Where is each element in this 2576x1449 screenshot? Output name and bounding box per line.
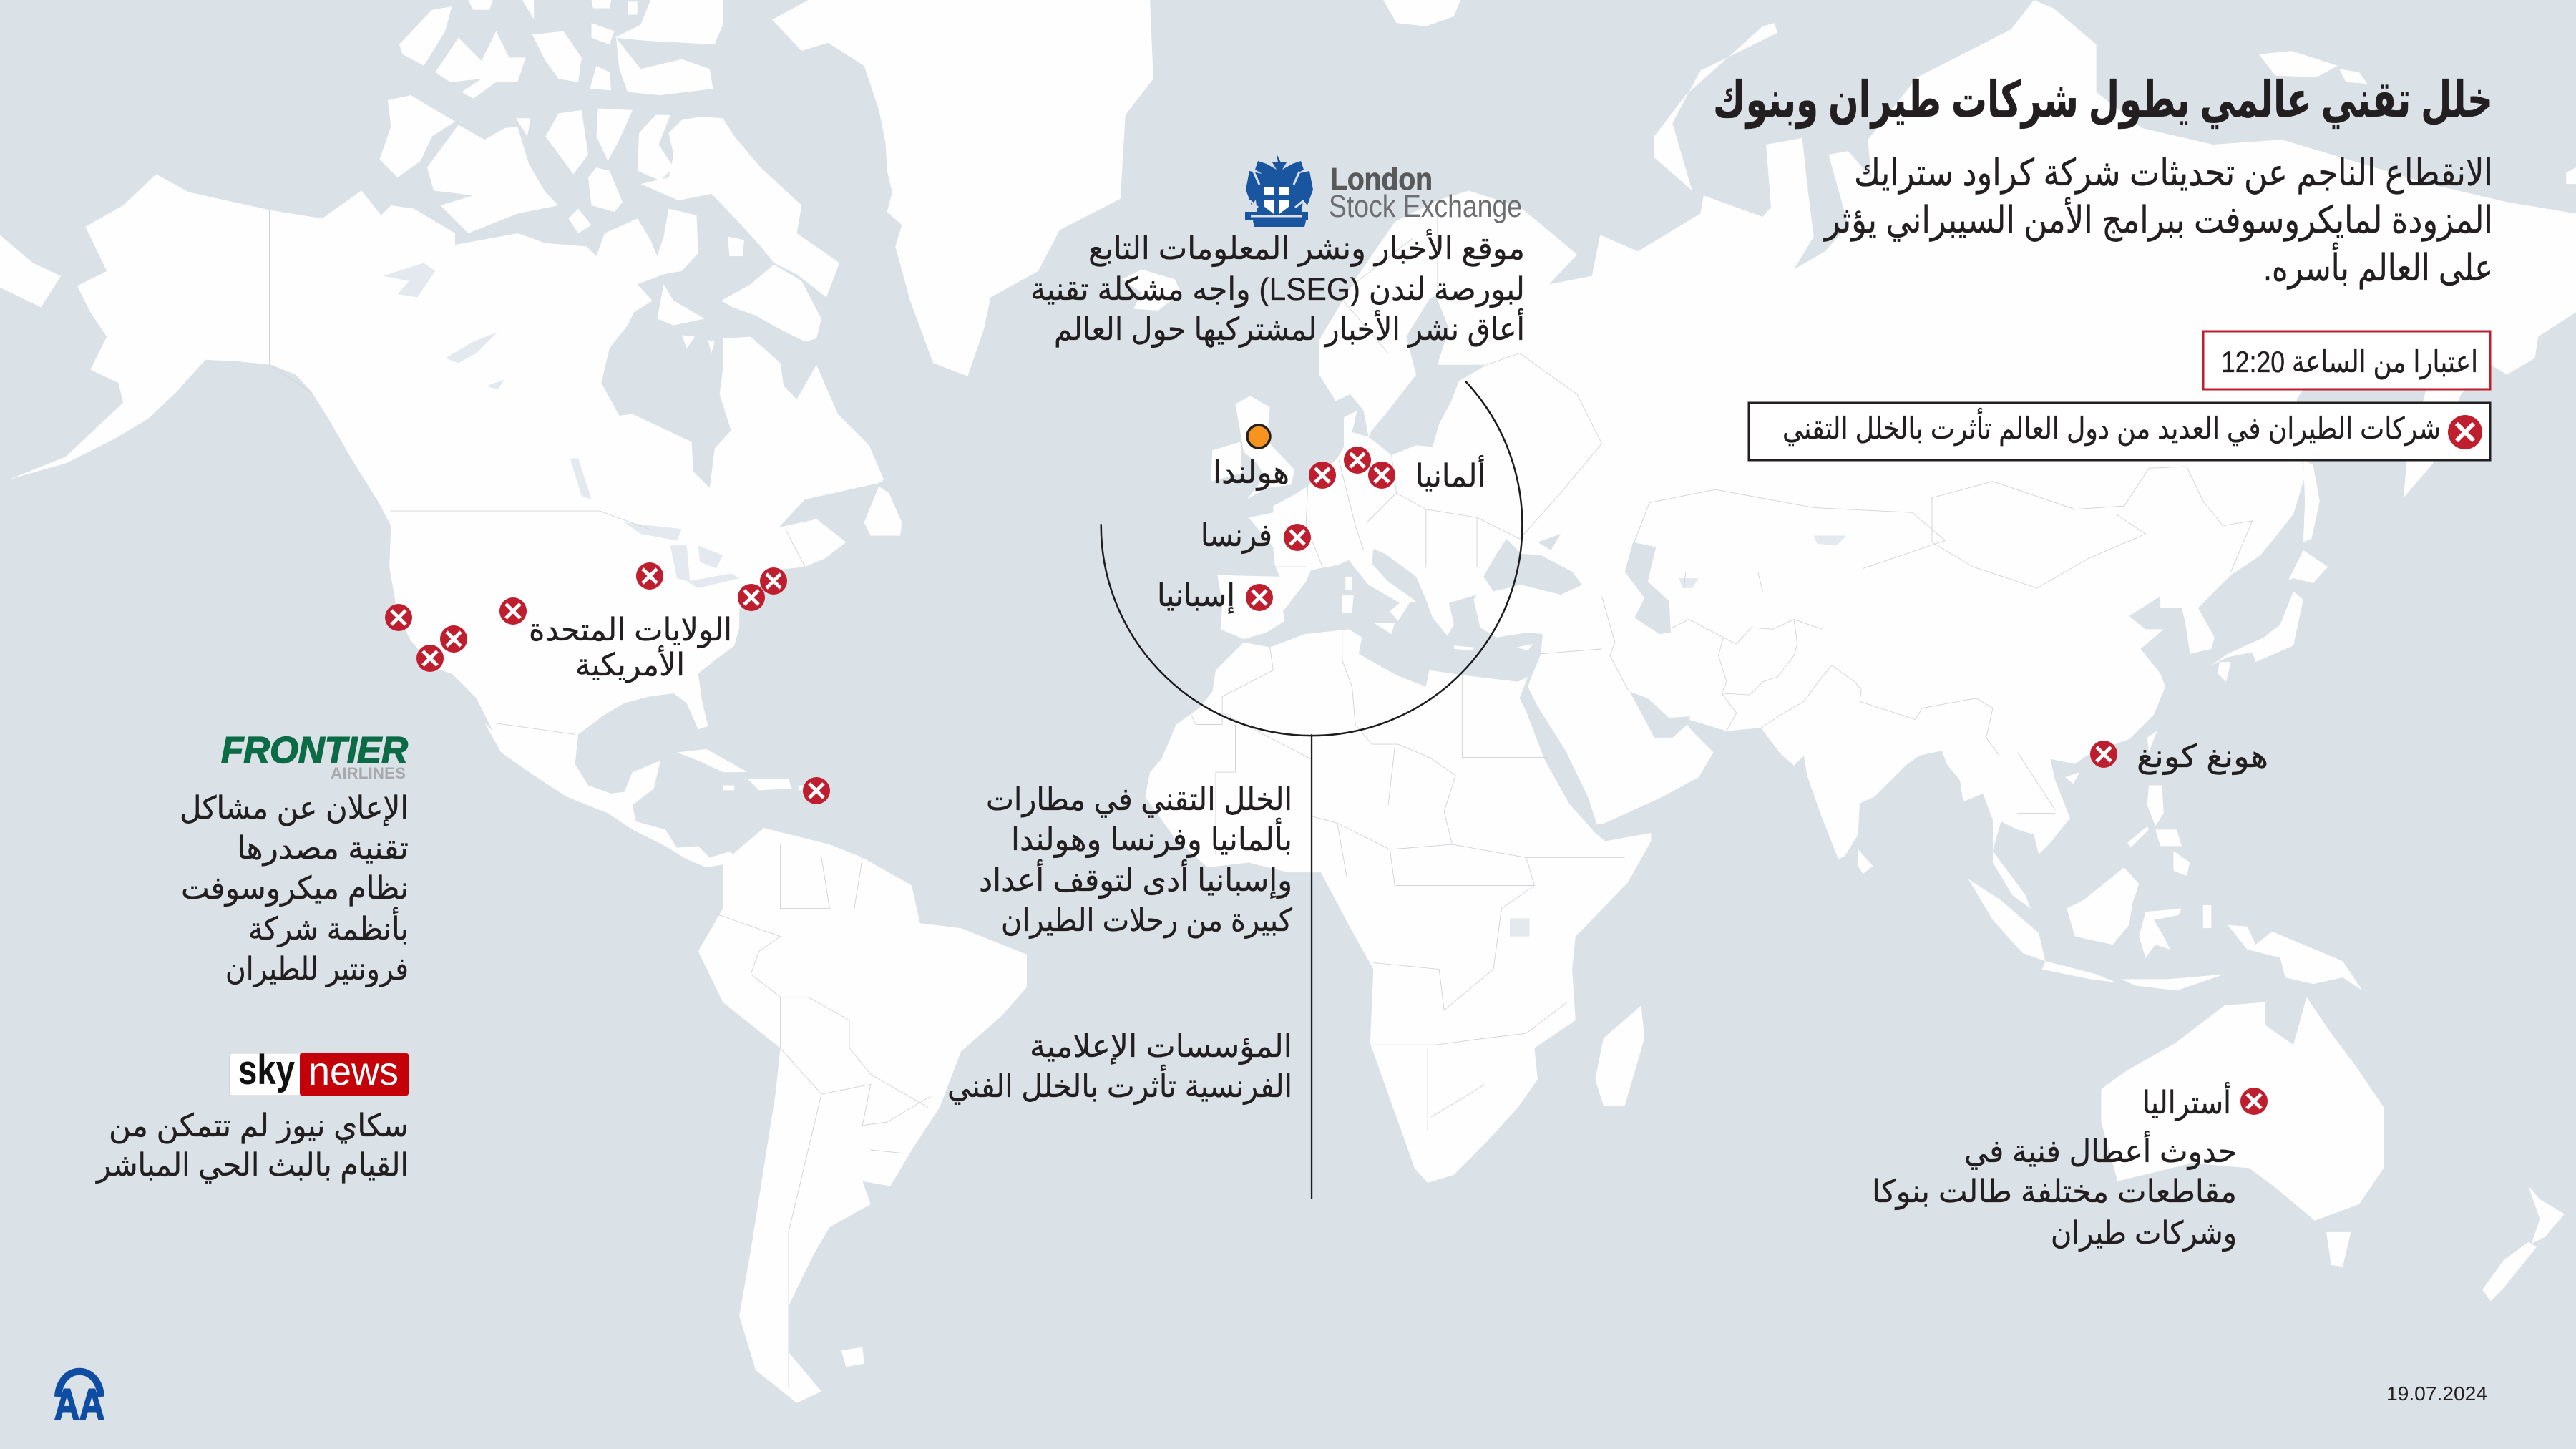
text: LSEG note bbox=[1030, 228, 1525, 348]
text: Australia note: حدوث أعطال فنية في bbox=[1964, 1131, 2237, 1170]
logo: Anadolu Agency: AA bbox=[54, 1380, 104, 1428]
logo: London Stock Exchange: Stock Exchange bbox=[1329, 189, 1522, 224]
text: Frontier note: فرونتير للطيران bbox=[225, 952, 409, 987]
Caspian Sea bbox=[1625, 542, 1671, 634]
label: France: فرنسا bbox=[1201, 518, 1272, 554]
Greenland bbox=[772, 0, 1153, 376]
text: Australia note bbox=[1872, 1131, 2237, 1252]
label: United States bbox=[529, 613, 732, 683]
marker: Australia bbox=[2240, 1088, 2268, 1115]
lakes bbox=[383, 263, 1847, 937]
text: French media note: الفرنسية تأثرت بالخلل الفني bbox=[947, 1064, 1292, 1105]
text: Australia note: مقاطعات مختلفة طالت بنوكا bbox=[1872, 1174, 2237, 1210]
marker: US Colorado bbox=[499, 597, 527, 625]
United Kingdom bbox=[1236, 396, 1294, 499]
text: European airports note: وإسبانيا أدى لتوقف أعداد bbox=[979, 859, 1292, 899]
text: Sky News note bbox=[95, 1108, 409, 1184]
marker: US Nevada bbox=[440, 625, 467, 653]
Africa bbox=[1145, 629, 1651, 1183]
marker: Germany north bbox=[1344, 447, 1371, 474]
text: Sky News note: القيام بالبث الحي المباشر bbox=[95, 1148, 409, 1184]
marker: US California south bbox=[416, 645, 444, 672]
text: Frontier note: الإعلان عن مشاكل bbox=[180, 791, 409, 826]
country borders bbox=[270, 200, 2253, 1388]
text: European airports note: بألمانيا وفرنسا وهولندا bbox=[1011, 817, 1292, 858]
label: Australia: أستراليا bbox=[2142, 1082, 2231, 1121]
icon: crest bbox=[1245, 154, 1313, 227]
subtitle: على العالم بأسره. bbox=[2263, 242, 2493, 290]
label: Hong Kong: هونغ كونغ bbox=[2137, 739, 2268, 775]
text: LSEG note: لبورصة لندن (LSEG) واجه مشكلة تقنية bbox=[1030, 272, 1525, 308]
text: Frontier note bbox=[180, 791, 409, 987]
Southeast Asian islands bbox=[2147, 785, 2164, 826]
label: United States: الأمريكية bbox=[575, 645, 685, 683]
text: Frontier note: بأنظمة شركة bbox=[248, 907, 409, 947]
marker: Hong Kong bbox=[2090, 741, 2117, 768]
subtitle: الانقطاع الناجم عن تحديثات شركة كراود سترايك bbox=[1854, 152, 2493, 195]
label: Netherlands: هولندا bbox=[1213, 455, 1289, 491]
logo: Sky News: sky bbox=[238, 1047, 295, 1093]
South America bbox=[698, 828, 1027, 1403]
connector line bbox=[1311, 734, 1312, 1199]
text: Australia note: وشركات طيران bbox=[2051, 1216, 2237, 1252]
time box bbox=[2203, 331, 2490, 389]
subtitle bbox=[1823, 152, 2493, 290]
New Zealand bbox=[2528, 1186, 2565, 1244]
Iceland bbox=[1122, 270, 1181, 311]
Eurasia bbox=[1217, 0, 2576, 909]
legend box: شركات الطيران في العديد من دول العالم تأثرت بالخلل التقني bbox=[1782, 407, 2441, 447]
Arctic islands of Eurasia bbox=[1383, 0, 1460, 26]
text: Sky News note: سكاي نيوز لم تتمكن من bbox=[109, 1108, 409, 1144]
label: Spain: إسبانيا bbox=[1157, 578, 1235, 614]
text: French media note: المؤسسات الإعلامية bbox=[1030, 1029, 1292, 1065]
label: Germany: ألمانيا bbox=[1415, 455, 1485, 494]
Canadian Arctic islands bbox=[379, 95, 455, 177]
marker: London bbox=[1247, 425, 1270, 448]
logo: London Stock Exchange: London bbox=[1330, 162, 1433, 197]
logo: Sky News bbox=[230, 1047, 409, 1096]
logo: London Stock Exchange bbox=[1245, 154, 1522, 227]
Ireland bbox=[1211, 442, 1242, 482]
marker: US New York bbox=[760, 567, 787, 595]
marker: Spain bbox=[1246, 584, 1273, 611]
text: Frontier note: تقنية مصدرها bbox=[237, 831, 409, 867]
Gulf of California bbox=[452, 673, 493, 731]
Caribbean islands bbox=[677, 749, 748, 772]
Chukotka west edge bbox=[0, 235, 61, 307]
Baltic Sea bbox=[1368, 296, 1487, 455]
marker: Germany east bbox=[1368, 462, 1395, 489]
text: LSEG note: موقع الأخبار ونشر المعلومات التابع bbox=[1088, 228, 1525, 267]
marker: Caribbean bbox=[803, 777, 830, 804]
highlight circle arc bbox=[1101, 381, 1522, 736]
marker: US Washington bbox=[738, 584, 765, 611]
subtitle: المزودة لمايكروسوفت ببرامج الأمن السيبراني يؤثر bbox=[1823, 197, 2493, 242]
inland seas bbox=[452, 296, 1671, 731]
legend box bbox=[1749, 403, 2490, 460]
icon: legend red x bbox=[2448, 415, 2482, 449]
Black Sea bbox=[1483, 539, 1582, 595]
text: Frontier note: نظام ميكروسوفت bbox=[181, 871, 409, 907]
text: French media note bbox=[947, 1029, 1292, 1105]
logo: Frontier Airlines: FRONTIER bbox=[221, 730, 408, 771]
North America bbox=[8, 174, 884, 867]
date: 19.07.2024 bbox=[2386, 1382, 2487, 1405]
text: European airports note: كبيرة من رحلات الطيران bbox=[1001, 903, 1292, 939]
Madagascar bbox=[1595, 1005, 1644, 1106]
text: LSEG note: أعاق نشر الأخبار لمشتركيها حول العالم bbox=[1054, 308, 1525, 348]
marker: US California north bbox=[385, 604, 412, 631]
marker: US Chicago bbox=[636, 562, 663, 590]
logo: Frontier Airlines: AIRLINES bbox=[331, 764, 406, 782]
Australia bbox=[2101, 997, 2384, 1221]
marker: Netherlands bbox=[1309, 462, 1336, 489]
text: European airports note bbox=[979, 782, 1292, 939]
marker: France bbox=[1284, 524, 1311, 551]
logo: Sky News: news bbox=[308, 1048, 399, 1093]
label: United States: الولايات المتحدة bbox=[529, 613, 732, 648]
Mediterranean islands bbox=[1373, 623, 1395, 634]
text: European airports note: الخلل التقني في مطارات bbox=[986, 782, 1292, 818]
East Asian islands bbox=[2211, 592, 2303, 665]
time box: اعتبارا من الساعة 12:20 bbox=[2221, 345, 2478, 379]
